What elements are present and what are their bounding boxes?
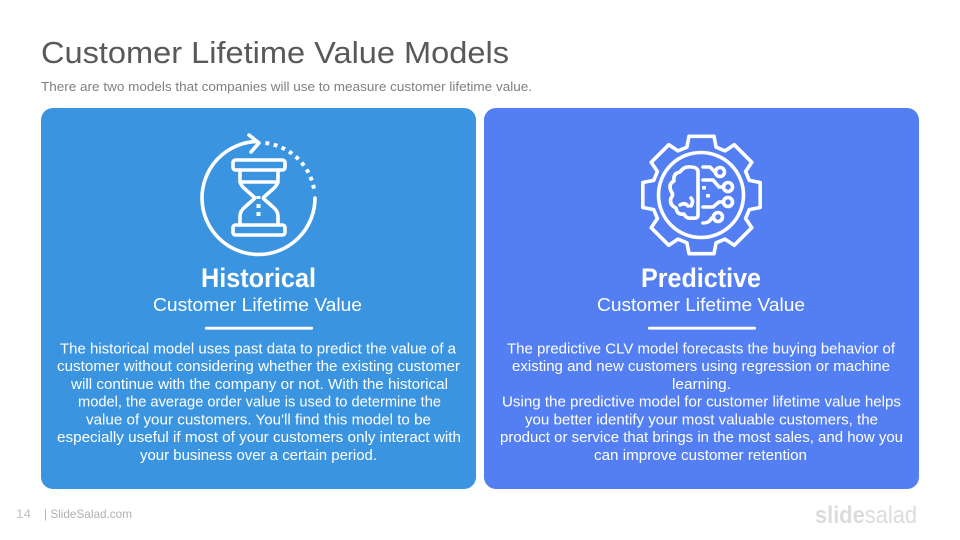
text block: historical description: model, the average order value is used to determine the	[78, 394, 441, 410]
title: Customer Lifetime Value Models	[41, 35, 509, 70]
subheading: historical: Customer Lifetime Value	[153, 295, 362, 315]
panel: predictive	[484, 108, 919, 489]
footer source: | SlideSalad.com	[44, 507, 132, 521]
heading: predictive: Predictive	[641, 263, 761, 293]
subtitle: There are two models that companies will use to measure customer lifetime value.	[41, 80, 532, 94]
text block: predictive description	[500, 342, 903, 464]
icon: gear with brain and circuits	[643, 136, 760, 254]
panel: historical	[41, 108, 476, 489]
text block: predictive description: can improve customer retention	[594, 448, 807, 464]
text block: predictive description: you better identify your most valuable customers, the	[525, 412, 878, 428]
logo: slidesalad wordmark: slidesalad	[815, 502, 917, 529]
icon: hourglass with circular arrow	[202, 135, 315, 254]
text block: predictive description: The predictive CLV model forecasts the buying behavior of	[507, 342, 896, 358]
text block: predictive description: learning.	[672, 377, 731, 393]
text block: predictive description: Using the predictive model for customer lifetime value helps	[502, 394, 901, 410]
subheading: predictive: Customer Lifetime Value	[597, 295, 805, 315]
divider	[648, 327, 756, 330]
text block: historical description	[57, 342, 461, 464]
text block: historical description: The historical model uses past data to predict the value of a	[60, 342, 456, 358]
text block: predictive description: product or service that brings in the most sales, and how you	[500, 430, 903, 446]
heading: historical: Historical	[201, 263, 316, 293]
divider	[205, 327, 313, 330]
text block: predictive description: existing and new customers using regression or machine	[512, 359, 890, 375]
text block: historical description: your business over a certain period.	[140, 448, 377, 464]
text block: historical description: customer without considering whether the existing customer	[57, 359, 460, 375]
text block: historical description: especially useful if most of your customers only interact with	[57, 430, 461, 446]
text block: historical description: value of your customers. You'll find this model to be	[86, 412, 431, 428]
page number: 14	[16, 507, 31, 521]
text block: historical description: will continue with the company or not. With the historical	[70, 377, 448, 393]
